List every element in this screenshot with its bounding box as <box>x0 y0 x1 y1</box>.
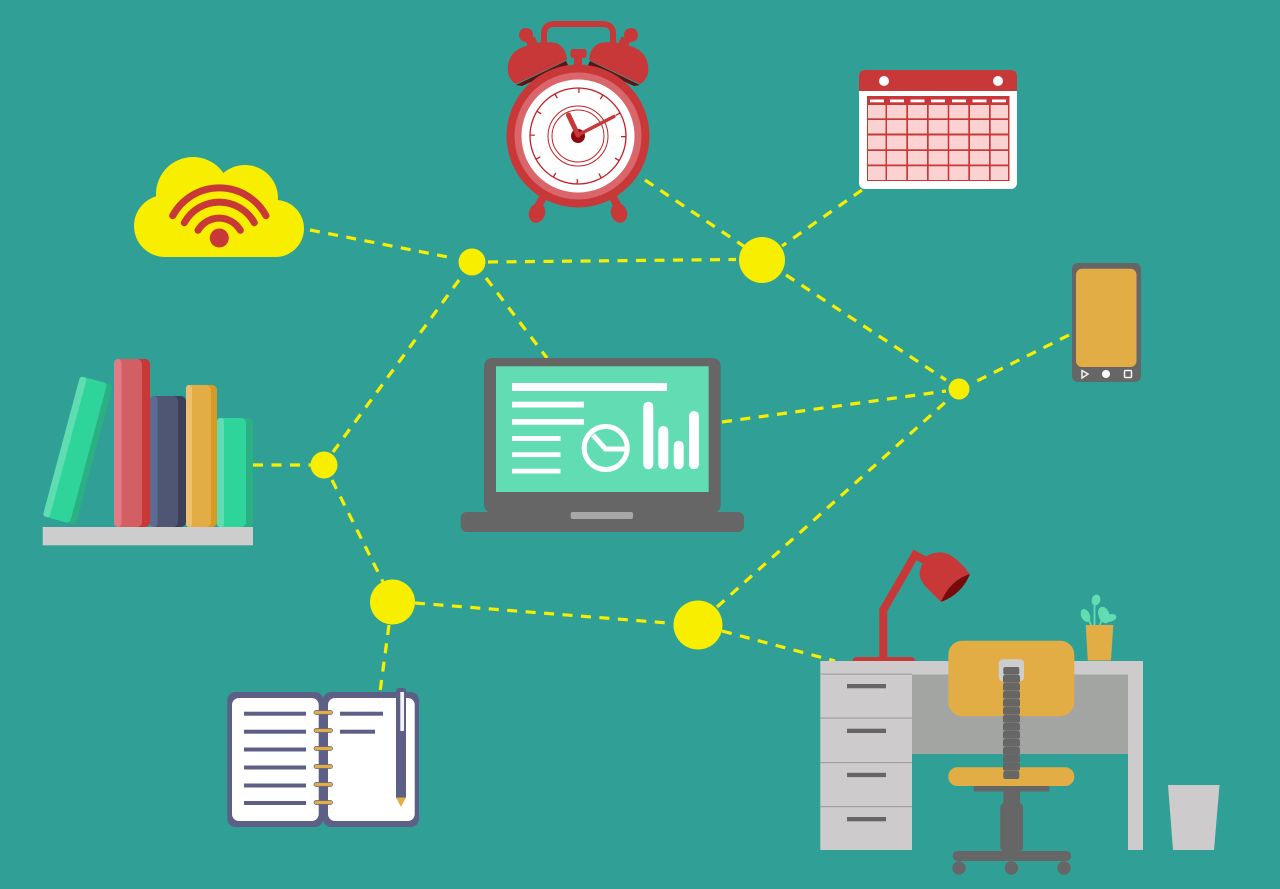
cloud shape <box>134 157 304 257</box>
chair wheels <box>952 861 1071 875</box>
icon: wastebasket <box>1168 785 1220 850</box>
icon: alarm clock <box>506 24 650 225</box>
calendar header <box>859 70 1017 91</box>
phone body <box>1072 263 1141 382</box>
small green book <box>217 418 253 527</box>
navy book <box>150 396 186 527</box>
lamp base <box>853 657 915 665</box>
dial ring and ticks <box>530 88 626 184</box>
wifi symbol <box>173 188 266 248</box>
lamp shade inner <box>941 574 970 602</box>
chair back <box>948 641 1074 716</box>
top post <box>570 49 586 68</box>
day cells <box>868 105 1008 180</box>
laptop screen <box>496 366 709 492</box>
icon: laptop <box>461 358 744 532</box>
clock body <box>506 64 650 208</box>
icon: potted plant <box>1079 594 1117 660</box>
phone buttons <box>1082 370 1132 378</box>
plant pot <box>1086 625 1113 660</box>
icon: calendar <box>859 70 1017 189</box>
pen <box>396 688 406 807</box>
pie chart <box>584 426 627 470</box>
chair bracket <box>999 659 1024 681</box>
modesty panel <box>912 674 1128 754</box>
shelf <box>43 527 253 545</box>
desk right leg <box>1128 674 1143 850</box>
chair base <box>953 851 1071 861</box>
left page lines <box>244 712 306 805</box>
desk top <box>820 661 1143 674</box>
chair plate <box>974 786 1049 792</box>
lamp arm <box>883 555 930 658</box>
right page <box>328 698 415 821</box>
yellow book <box>186 385 217 527</box>
left bell <box>508 28 568 86</box>
right cover <box>323 692 419 827</box>
laptop notch <box>571 512 633 519</box>
icon: desk lamp <box>853 552 970 665</box>
chair column <box>1000 791 1023 851</box>
screen text lines <box>512 383 667 474</box>
network: dashed connectors <box>253 180 1069 692</box>
laptop base <box>461 512 744 532</box>
tilted green book <box>43 376 113 525</box>
spiral rings <box>314 710 332 804</box>
right bell <box>588 28 648 86</box>
lamp shade <box>920 552 970 602</box>
drawer unit <box>820 674 912 850</box>
icon: open notebook <box>227 688 419 827</box>
right page lines <box>340 712 383 734</box>
left page <box>232 698 319 821</box>
network: nodes <box>310 237 970 650</box>
icon: desk <box>820 661 1143 850</box>
chair spine <box>1003 667 1020 779</box>
clock bezel <box>514 72 642 200</box>
icon: wifi cloud <box>134 157 304 257</box>
binding holes <box>879 76 1003 86</box>
icon: smartphone <box>1072 263 1141 382</box>
calendar grid <box>867 96 1010 181</box>
left foot <box>526 195 548 225</box>
drawer handles <box>847 684 886 821</box>
weekday markers <box>870 100 1006 102</box>
clock hands <box>568 115 614 135</box>
left cover <box>227 692 323 827</box>
phone screen <box>1076 269 1136 367</box>
drawer dividers <box>820 674 912 807</box>
icon: office chair <box>948 641 1074 875</box>
calendar page <box>859 70 1017 189</box>
clock face <box>522 80 634 192</box>
laptop lid <box>484 358 721 513</box>
clock center <box>571 129 585 143</box>
icon: bookshelf <box>43 359 253 545</box>
plant stems and leaves <box>1079 594 1117 625</box>
red book <box>114 359 150 527</box>
bar chart <box>643 402 699 469</box>
right foot <box>608 195 630 225</box>
clock handle <box>544 24 613 48</box>
chair seat <box>948 767 1074 786</box>
